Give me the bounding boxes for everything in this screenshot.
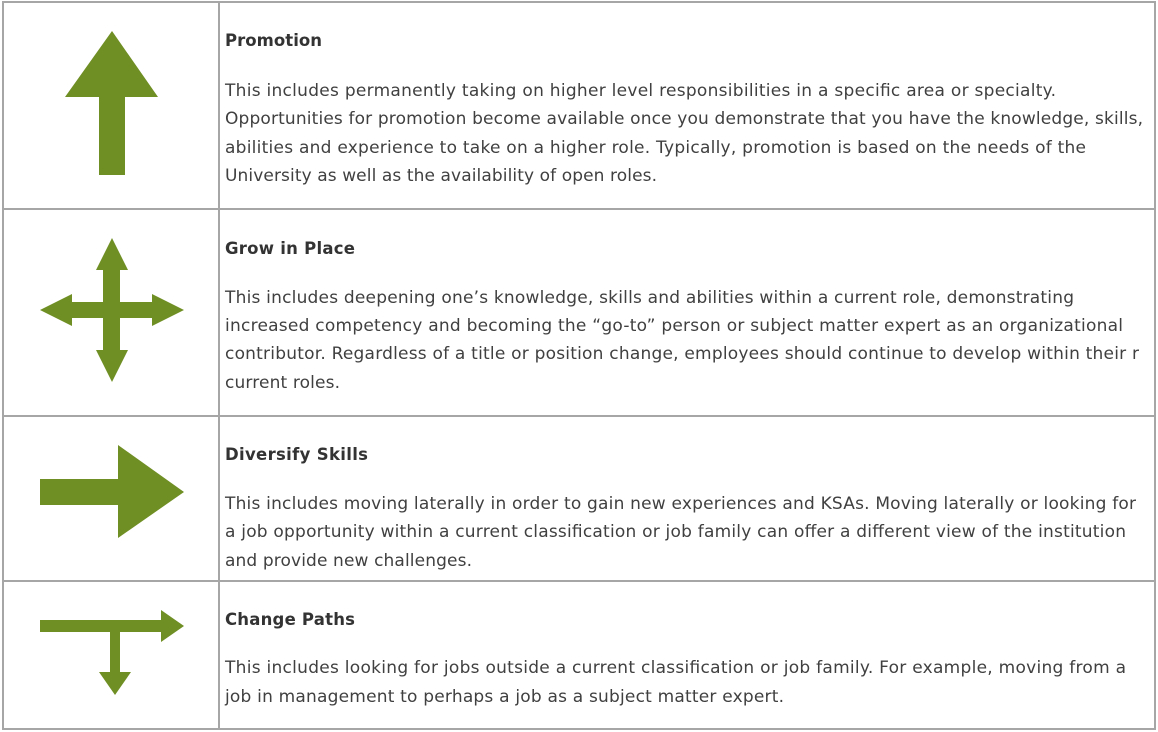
icon: up arrow xyxy=(65,31,158,175)
icon: branching arrow xyxy=(40,610,184,695)
heading: Diversify Skills: Diversify Skills xyxy=(225,445,368,464)
text block: Promotion description: Opportunities for promotion become available once you demonstrate that you have the knowledge, skills, xyxy=(225,109,1143,129)
heading: Promotion: Promotion xyxy=(225,31,322,50)
panel: Promotion xyxy=(65,31,1143,186)
heading: Change Paths: Change Paths xyxy=(225,610,355,629)
heading: Grow in Place: Grow in Place xyxy=(225,239,355,258)
text block: Grow in Place description: This includes deepening one’s knowledge, skills and abilities within a current role, demonstrating xyxy=(224,288,1074,308)
text block: Grow in Place description: increased competency and becoming the “go-to” person or subject matter expert as an organizational xyxy=(225,316,1123,336)
panel: Grow in Place xyxy=(40,238,1139,393)
text block: Grow in Place description xyxy=(224,288,1139,393)
text block: Change Paths description: This includes looking for jobs outside a current classification or job family. For example, moving from a xyxy=(224,658,1126,678)
text block: Promotion description: abilities and experience to take on a higher role. Typically, promotion is based on the needs of the xyxy=(225,138,1086,158)
panel: Diversify Skills xyxy=(40,445,1136,571)
text block: Diversify Skills description: This includes moving laterally in order to gain new experiences and KSAs. Moving laterally or looking for xyxy=(224,494,1136,514)
text block: Promotion description: University as well as the availability of open roles. xyxy=(225,166,657,186)
icon: right arrow xyxy=(40,445,184,538)
text block: Diversify Skills description: and provide new challenges. xyxy=(225,551,472,571)
text block: Grow in Place description: contributor. Regardless of a title or position change, employees should continue to develop within their r xyxy=(225,344,1139,364)
text block: Grow in Place description: current roles. xyxy=(225,373,340,393)
text block: Promotion description: This includes permanently taking on higher level responsibilities in a specific area or specialty. xyxy=(224,81,1056,101)
text block: Diversify Skills description xyxy=(224,494,1136,571)
text block: Promotion description xyxy=(224,81,1143,186)
icon: four-way arrow xyxy=(40,238,184,382)
text block: Diversify Skills description: a job opportunity within a current classification or job family can offer a different view of the institution xyxy=(225,522,1126,542)
text block: Change Paths description: job in management to perhaps a job as a subject matter expert. xyxy=(224,687,784,707)
text block: Change Paths description xyxy=(224,658,1126,707)
panel: Change Paths xyxy=(40,610,1126,707)
